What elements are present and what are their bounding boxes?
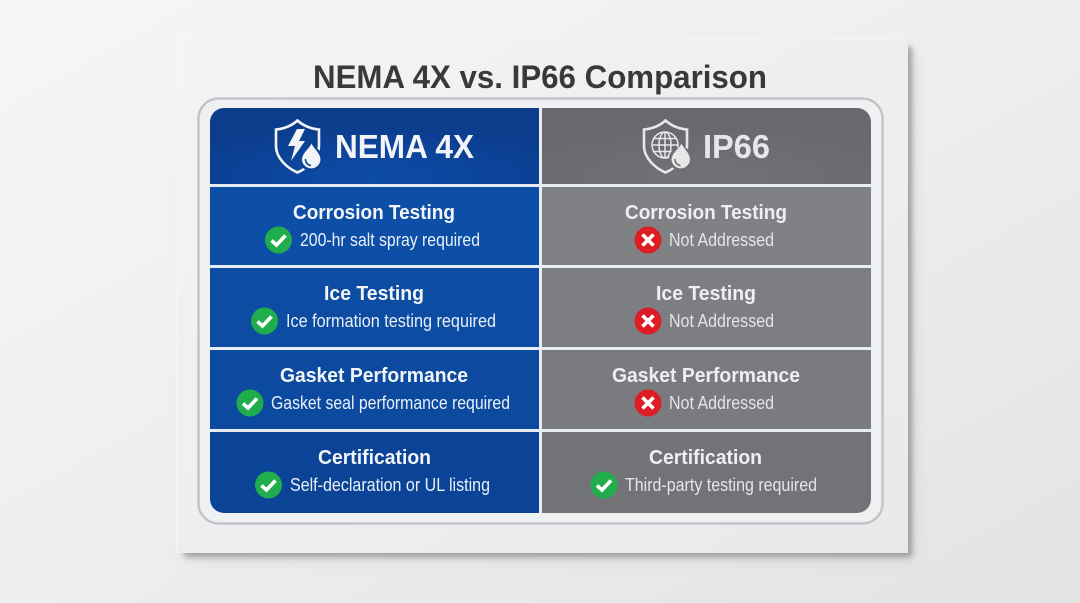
icon: green check xyxy=(236,390,264,416)
icon: red cross xyxy=(634,226,662,254)
icon: shield with globe and water drop xyxy=(644,120,693,172)
row: ice testing, NEMA 4X xyxy=(251,283,496,334)
row: corrosion testing, NEMA 4X xyxy=(265,202,480,254)
row: gasket performance, IP66: Gasket Performance xyxy=(612,365,800,387)
row: corrosion testing, NEMA 4X: 200-hr salt spray required xyxy=(300,230,480,250)
row: ice testing, NEMA 4X: Ice Testing xyxy=(324,283,424,305)
row: corrosion testing, IP66: Corrosion Testing xyxy=(625,202,787,224)
row: gasket performance, NEMA 4X: Gasket Performance xyxy=(280,365,468,387)
row: corrosion testing, NEMA 4X: Corrosion Testing xyxy=(293,202,455,224)
row: ice testing, IP66: Not Addressed xyxy=(669,311,774,331)
icon: red cross xyxy=(634,308,662,334)
row: ice testing, IP66 xyxy=(634,283,774,334)
title: NEMA 4X vs. IP66 Comparison xyxy=(313,59,767,95)
icon: red cross xyxy=(634,390,662,416)
row: ice testing, NEMA 4X: Ice formation testing required xyxy=(286,311,496,331)
icon: green check xyxy=(251,308,278,334)
column header: NEMA 4X xyxy=(276,120,474,172)
row: gasket performance, NEMA 4X: Gasket seal performance required xyxy=(271,393,510,413)
icon: green check xyxy=(265,226,292,254)
paper card xyxy=(176,38,914,560)
row: corrosion testing, IP66: Not Addressed xyxy=(669,230,774,250)
row: corrosion testing, IP66 xyxy=(625,202,787,254)
row: certification, IP66 xyxy=(590,447,817,498)
row: certification, IP66: Third-party testing required xyxy=(625,475,817,495)
icon: green check xyxy=(255,472,282,498)
row: ice testing, IP66: Ice Testing xyxy=(656,283,756,305)
row: gasket performance, IP66 xyxy=(612,365,800,416)
column header: IP66 xyxy=(644,120,770,172)
column header: IP66: IP66 xyxy=(703,128,770,165)
row: certification, NEMA 4X xyxy=(255,447,490,498)
row: gasket performance, NEMA 4X xyxy=(236,365,510,416)
row: certification, NEMA 4X: Self-declaration or UL listing xyxy=(290,475,490,495)
row: gasket performance, IP66: Not Addressed xyxy=(669,393,774,413)
comparison table xyxy=(198,98,882,524)
icon: green check xyxy=(590,472,618,498)
column header: NEMA 4X: NEMA 4X xyxy=(335,128,474,165)
row: certification, IP66: Certification xyxy=(649,447,762,469)
table frame xyxy=(198,98,882,524)
table cells xyxy=(210,108,871,513)
icon: shield with lightning and water drop xyxy=(276,120,323,172)
row: certification, NEMA 4X: Certification xyxy=(318,447,431,469)
